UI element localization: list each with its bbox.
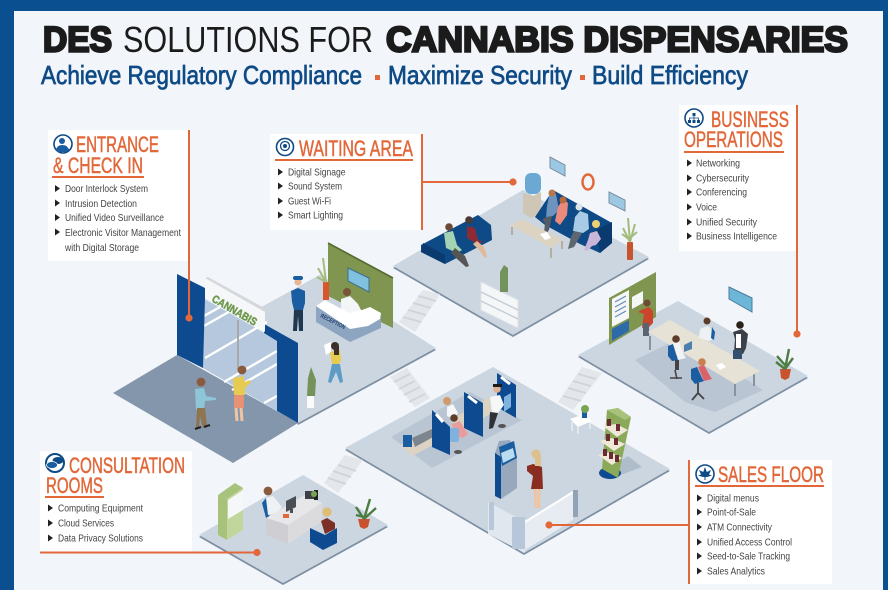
list: Intrusion Detection <box>65 198 137 210</box>
heading: BUSINESS <box>711 107 789 132</box>
icon: cannabis leaf <box>696 465 714 483</box>
stairs to sales floor <box>390 368 430 407</box>
list <box>697 492 792 578</box>
security gates <box>488 490 578 553</box>
list: Unified Security <box>696 216 758 228</box>
panel: waiting area <box>270 134 422 230</box>
icon: org chart <box>685 109 703 127</box>
list: Digital Signage <box>288 166 346 178</box>
dark entry mat <box>113 355 298 463</box>
entrance door <box>177 274 298 423</box>
title: SOLUTIONS FOR <box>123 19 373 60</box>
seated woman red <box>691 358 712 400</box>
list: Cloud Services <box>58 518 114 530</box>
red planter <box>317 258 329 300</box>
sofa with four people <box>535 190 612 253</box>
icon: location pin <box>276 138 294 156</box>
woman at ATM <box>527 449 543 508</box>
white shelf with plant <box>481 265 518 328</box>
list: Digital menus <box>707 492 759 504</box>
stairs to consultation rooms <box>324 455 363 493</box>
heading: WAITING AREA <box>299 136 413 161</box>
icon: speech bubbles <box>46 454 64 472</box>
receptionist <box>341 288 362 314</box>
subtitle <box>41 60 748 90</box>
subtitle: Maximize Security <box>388 60 572 90</box>
list: Door Interlock System <box>65 183 148 195</box>
sofa with two people <box>421 215 492 267</box>
customer and agent seated <box>443 397 468 454</box>
reception desk: RECEPTION <box>319 313 346 331</box>
panel: consultation rooms <box>40 451 192 552</box>
cannabis sign <box>205 277 268 332</box>
potted plant <box>776 349 793 380</box>
heading: ROOMS <box>46 473 103 498</box>
security guard <box>291 276 305 331</box>
green reception wall <box>328 243 393 328</box>
list: Guest Wi-Fi <box>288 196 331 208</box>
woman reading <box>324 342 343 383</box>
seated attendant <box>489 384 511 429</box>
ATM <box>495 440 517 499</box>
callout line: sales floor <box>545 460 689 584</box>
cannabis sign: CANNABIS <box>210 293 259 329</box>
list: Smart Lighting <box>288 210 343 222</box>
blue privacy dividers <box>432 373 516 455</box>
panel: entrance and check in <box>48 130 188 261</box>
subtitle: Build Efficiency <box>592 60 748 90</box>
list: Sales Analytics <box>707 566 765 578</box>
callout line: waiting area <box>422 134 517 230</box>
heading: CONSULTATION <box>69 453 185 478</box>
list: Computing Equipment <box>58 502 143 514</box>
list: with Digital Storage <box>64 242 139 254</box>
green cabinet <box>218 483 243 540</box>
wall screen <box>729 287 752 312</box>
title <box>43 19 848 60</box>
heading: & CHECK IN <box>53 153 143 178</box>
list: Sound System <box>288 180 342 192</box>
subtitle: Achieve Regulatory Compliance <box>41 60 362 90</box>
white potted plant <box>307 367 316 408</box>
heading <box>53 132 159 178</box>
red planter <box>622 218 637 260</box>
list: Data Privacy Solutions <box>58 532 143 544</box>
list: Voice <box>696 202 717 214</box>
list: Business Intelligence <box>696 230 777 242</box>
heading <box>46 453 185 498</box>
list: Point-of-Sale <box>707 506 756 518</box>
coffee table <box>510 219 563 258</box>
stairs to waiting area <box>399 290 440 332</box>
water cooler <box>523 173 541 218</box>
doctor <box>262 487 282 518</box>
wall frames and ring <box>550 157 625 211</box>
visitor in yellow top <box>233 366 251 421</box>
presenter <box>638 300 653 336</box>
heading: ENTRANCE <box>76 132 159 157</box>
title: CANNABIS DISPENSARIES <box>386 20 848 60</box>
heading: OPERATIONS <box>684 127 783 152</box>
strategy board <box>609 272 656 345</box>
consultation desk <box>266 490 322 544</box>
list: Conferencing <box>696 186 747 198</box>
potted plant <box>356 499 376 529</box>
meeting table <box>648 320 760 396</box>
title: DES <box>43 20 112 60</box>
heading: SALES FLOOR <box>718 462 824 487</box>
isometric floor: entrance <box>113 243 436 463</box>
icon: visitor badge <box>54 135 72 153</box>
isometric floor: consultation rooms <box>199 475 388 585</box>
callout line: business operations <box>793 105 801 338</box>
list <box>48 502 143 544</box>
seated woman with laptop <box>668 335 692 379</box>
client in blue chair <box>310 507 337 550</box>
list: Cybersecurity <box>696 172 750 184</box>
list: Networking <box>696 158 740 170</box>
stairs to business operations <box>558 367 602 410</box>
panel: business operations <box>679 105 796 251</box>
kiosk desks <box>400 397 497 456</box>
heading <box>684 107 789 152</box>
list: Seed-to-Sale Tracking <box>707 550 790 562</box>
list <box>55 183 181 254</box>
seated man <box>699 318 715 341</box>
panel: sales floor <box>689 460 832 584</box>
side table with plant <box>570 405 592 434</box>
list: Electronic Visitor Management <box>65 227 181 239</box>
isometric floor: waiting area <box>393 157 649 337</box>
visitor in blue shirt <box>195 378 216 429</box>
list: Unified Video Surveillance <box>65 212 164 224</box>
isometric floor: business operations <box>558 272 808 434</box>
isometric floor: sales floor <box>345 367 670 555</box>
callout line: entrance <box>185 130 193 322</box>
list: ATM Connectivity <box>707 522 773 534</box>
reception desk <box>316 300 381 342</box>
product display <box>598 408 642 479</box>
standing man <box>733 321 748 359</box>
callout line: consultation rooms <box>40 549 261 556</box>
list <box>687 158 777 242</box>
list: Unified Access Control <box>707 536 792 548</box>
list <box>278 166 346 222</box>
